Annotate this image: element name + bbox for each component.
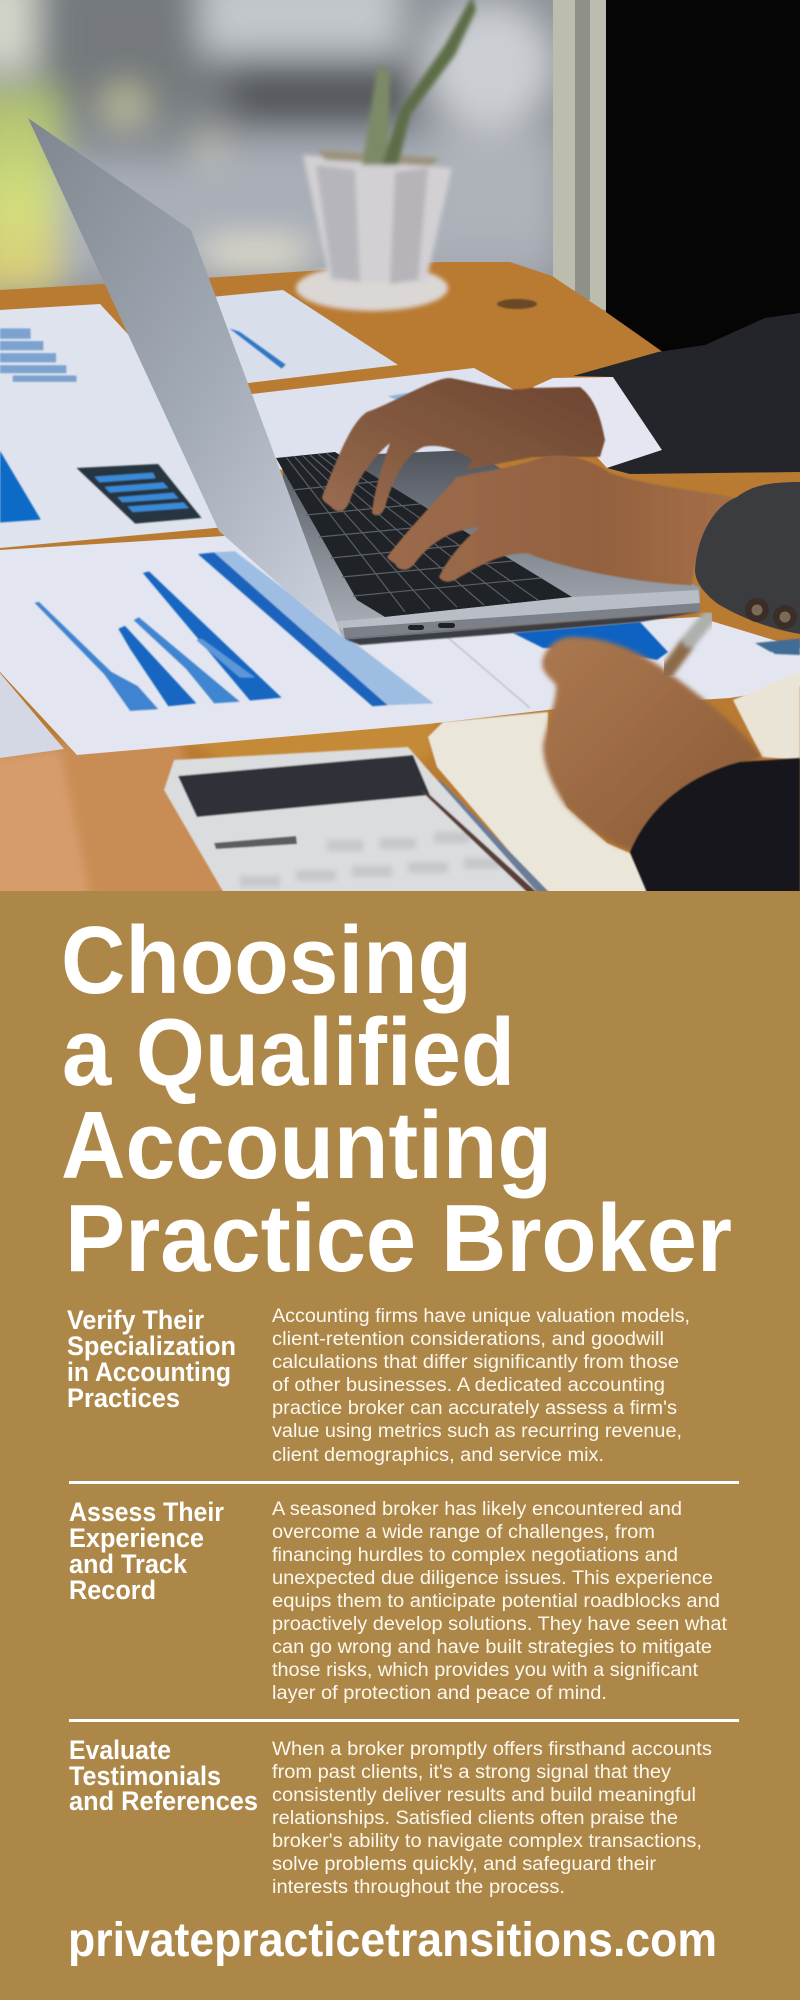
photo: hands typing on a laptop over financial reports xyxy=(0,0,800,920)
section 3 body text: relationships. Satisfied clients often praise the xyxy=(272,1808,678,1829)
lower hand xyxy=(387,456,735,585)
title: Accounting xyxy=(61,1092,552,1199)
pen xyxy=(668,618,708,670)
dark doorway xyxy=(606,0,800,370)
report paper: large lower xyxy=(0,535,800,755)
section 3: evaluate testimonials xyxy=(69,1735,712,1898)
section 3 body text: interests throughout the process. xyxy=(272,1877,565,1898)
section 2 body text: unexpected due diligence issues. This experience xyxy=(272,1568,713,1589)
section 3 body text: When a broker promptly offers firsthand accounts xyxy=(272,1739,712,1760)
blurred writing hand xyxy=(542,637,762,850)
section 1 heading: Specialization xyxy=(67,1331,236,1361)
section 2 body text: financing hurdles to complex negotiations and xyxy=(272,1545,678,1566)
website URL: privatepracticetransitions.com xyxy=(68,1914,717,1967)
section 1 body text: client-retention considerations, and goodwill xyxy=(272,1329,664,1350)
wooden table xyxy=(0,262,800,891)
title: a Qualified xyxy=(62,999,515,1106)
laptop base xyxy=(283,450,700,638)
section 1 body text: value using metrics such as recurring revenue, xyxy=(272,1421,682,1442)
window frame xyxy=(553,0,606,310)
section 2 body text: layer of protection and peace of mind. xyxy=(272,1683,607,1704)
table knot xyxy=(497,299,537,309)
section 1 heading: Practices xyxy=(67,1383,180,1413)
section 1 body text: practice broker can accurately assess a firm's xyxy=(272,1398,677,1419)
section 3 body text: from past clients, it's a strong signal that they xyxy=(272,1762,672,1783)
laptop front edge with ports xyxy=(330,590,700,645)
section 2 heading: and Track xyxy=(69,1549,187,1579)
section 2 heading: Experience xyxy=(69,1523,204,1553)
section 2 body text: equips them to anticipate potential roadblocks and xyxy=(272,1591,720,1612)
dark suit sleeve, upper xyxy=(573,313,800,474)
section 1: verify specialization xyxy=(67,1305,690,1466)
lower table highlight xyxy=(0,723,438,891)
section 2 body text xyxy=(272,1499,728,1704)
section 2 heading xyxy=(69,1497,224,1605)
section 2 body text: those risks, which provides you with a significant xyxy=(272,1660,699,1681)
blurred window background xyxy=(0,0,560,295)
calculator xyxy=(164,747,540,895)
chart strokes on reports xyxy=(0,328,800,711)
report paper: top right xyxy=(216,290,398,384)
section 3 heading: and References xyxy=(69,1786,258,1816)
section 2: assess experience xyxy=(69,1497,728,1704)
section 1 body text: Accounting firms have unique valuation models, xyxy=(272,1306,690,1327)
section 3 heading xyxy=(69,1735,258,1816)
report paper: middle xyxy=(252,368,515,470)
title: Choosing xyxy=(61,907,472,1014)
section 3 body text xyxy=(272,1739,712,1898)
title: Practice Broker xyxy=(65,1185,732,1292)
section 2 heading: Assess Their xyxy=(69,1497,224,1527)
section 1 heading: Verify Their xyxy=(67,1305,204,1335)
section 3 heading: Testimonials xyxy=(69,1761,221,1791)
upper hand xyxy=(322,378,605,515)
dark suit sleeve, lower, with buttons xyxy=(695,482,800,634)
section 3 body text: solve problems quickly, and safeguard their xyxy=(272,1854,657,1875)
section 3 heading: Evaluate xyxy=(69,1735,171,1765)
plant pot with saucer and plant xyxy=(296,0,476,311)
section 2 heading: Record xyxy=(69,1575,156,1605)
section 1 body text: client demographics, and service mix. xyxy=(272,1445,604,1466)
section 2 body text: can go wrong and have built strategies to mitigate xyxy=(272,1637,712,1658)
section 1 heading xyxy=(67,1305,236,1413)
section 1 heading: in Accounting xyxy=(67,1357,231,1387)
section 3 body text: broker's ability to navigate complex transactions, xyxy=(272,1831,702,1852)
section 1 body text: calculations that differ significantly from those xyxy=(272,1352,679,1373)
section 1 body text: of other businesses. A dedicated accounting xyxy=(272,1375,665,1396)
laptop keyboard xyxy=(276,452,572,617)
section 2 body text: overcome a wide range of challenges, from xyxy=(272,1522,655,1543)
section 3 body text: consistently deliver results and build meaningful xyxy=(272,1785,696,1806)
laptop lid xyxy=(28,118,342,637)
white shirt cuff xyxy=(533,377,662,468)
report paper: lower left xyxy=(0,673,64,758)
title xyxy=(61,907,732,1292)
notebook xyxy=(428,672,800,895)
section 2 body text: proactively develop solutions. They have seen what xyxy=(272,1614,728,1635)
dark sleeve, foreground xyxy=(630,758,800,895)
section 2 body text: A seasoned broker has likely encountered and xyxy=(272,1499,682,1520)
report paper: upper left xyxy=(0,304,218,548)
section 1 body text xyxy=(272,1306,690,1466)
